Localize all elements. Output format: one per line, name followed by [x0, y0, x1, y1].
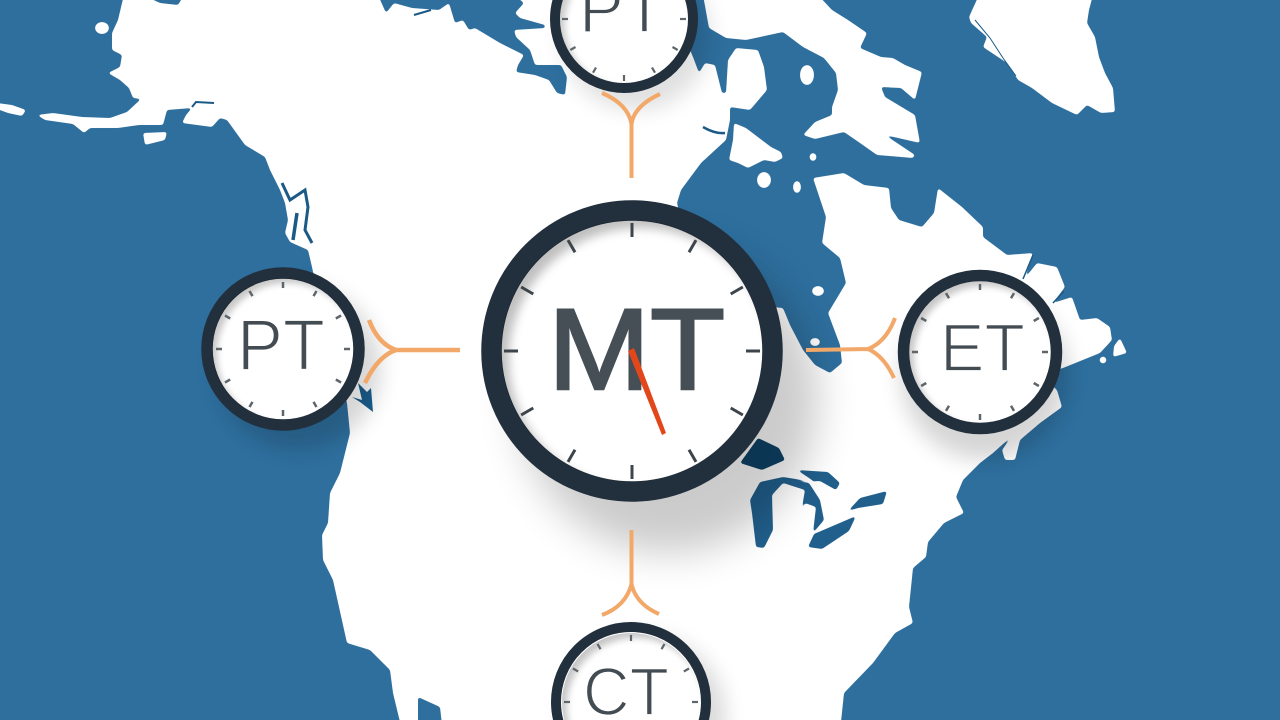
clock: PT west	[207, 273, 367, 433]
connector: right Y arrow	[806, 318, 895, 378]
clock: ET east	[904, 276, 1064, 436]
clock: CT bottom	[556, 627, 713, 720]
connector: bottom Y arrow	[602, 530, 659, 615]
clock ticks	[562, 0, 686, 81]
clock ticks	[564, 635, 698, 702]
map: northern bay and coastal waters	[143, 0, 567, 720]
clock: MT center	[492, 210, 781, 500]
clock ticks	[504, 223, 760, 479]
clock drop shadows	[216, 0, 1069, 720]
clock label ET: ET	[940, 310, 1025, 386]
clock hand	[628, 348, 666, 435]
clock label MT: MT	[548, 286, 725, 414]
clock ticks	[912, 284, 1048, 420]
clock label PT: PT	[237, 306, 325, 386]
connector: top Y arrow	[602, 93, 660, 178]
clock: PT top	[555, 0, 701, 96]
clock ticks	[216, 282, 350, 416]
map: Great Lakes	[740, 438, 887, 549]
map: dark inland waters	[192, 10, 1064, 412]
connector: left Y arrow	[365, 320, 460, 383]
